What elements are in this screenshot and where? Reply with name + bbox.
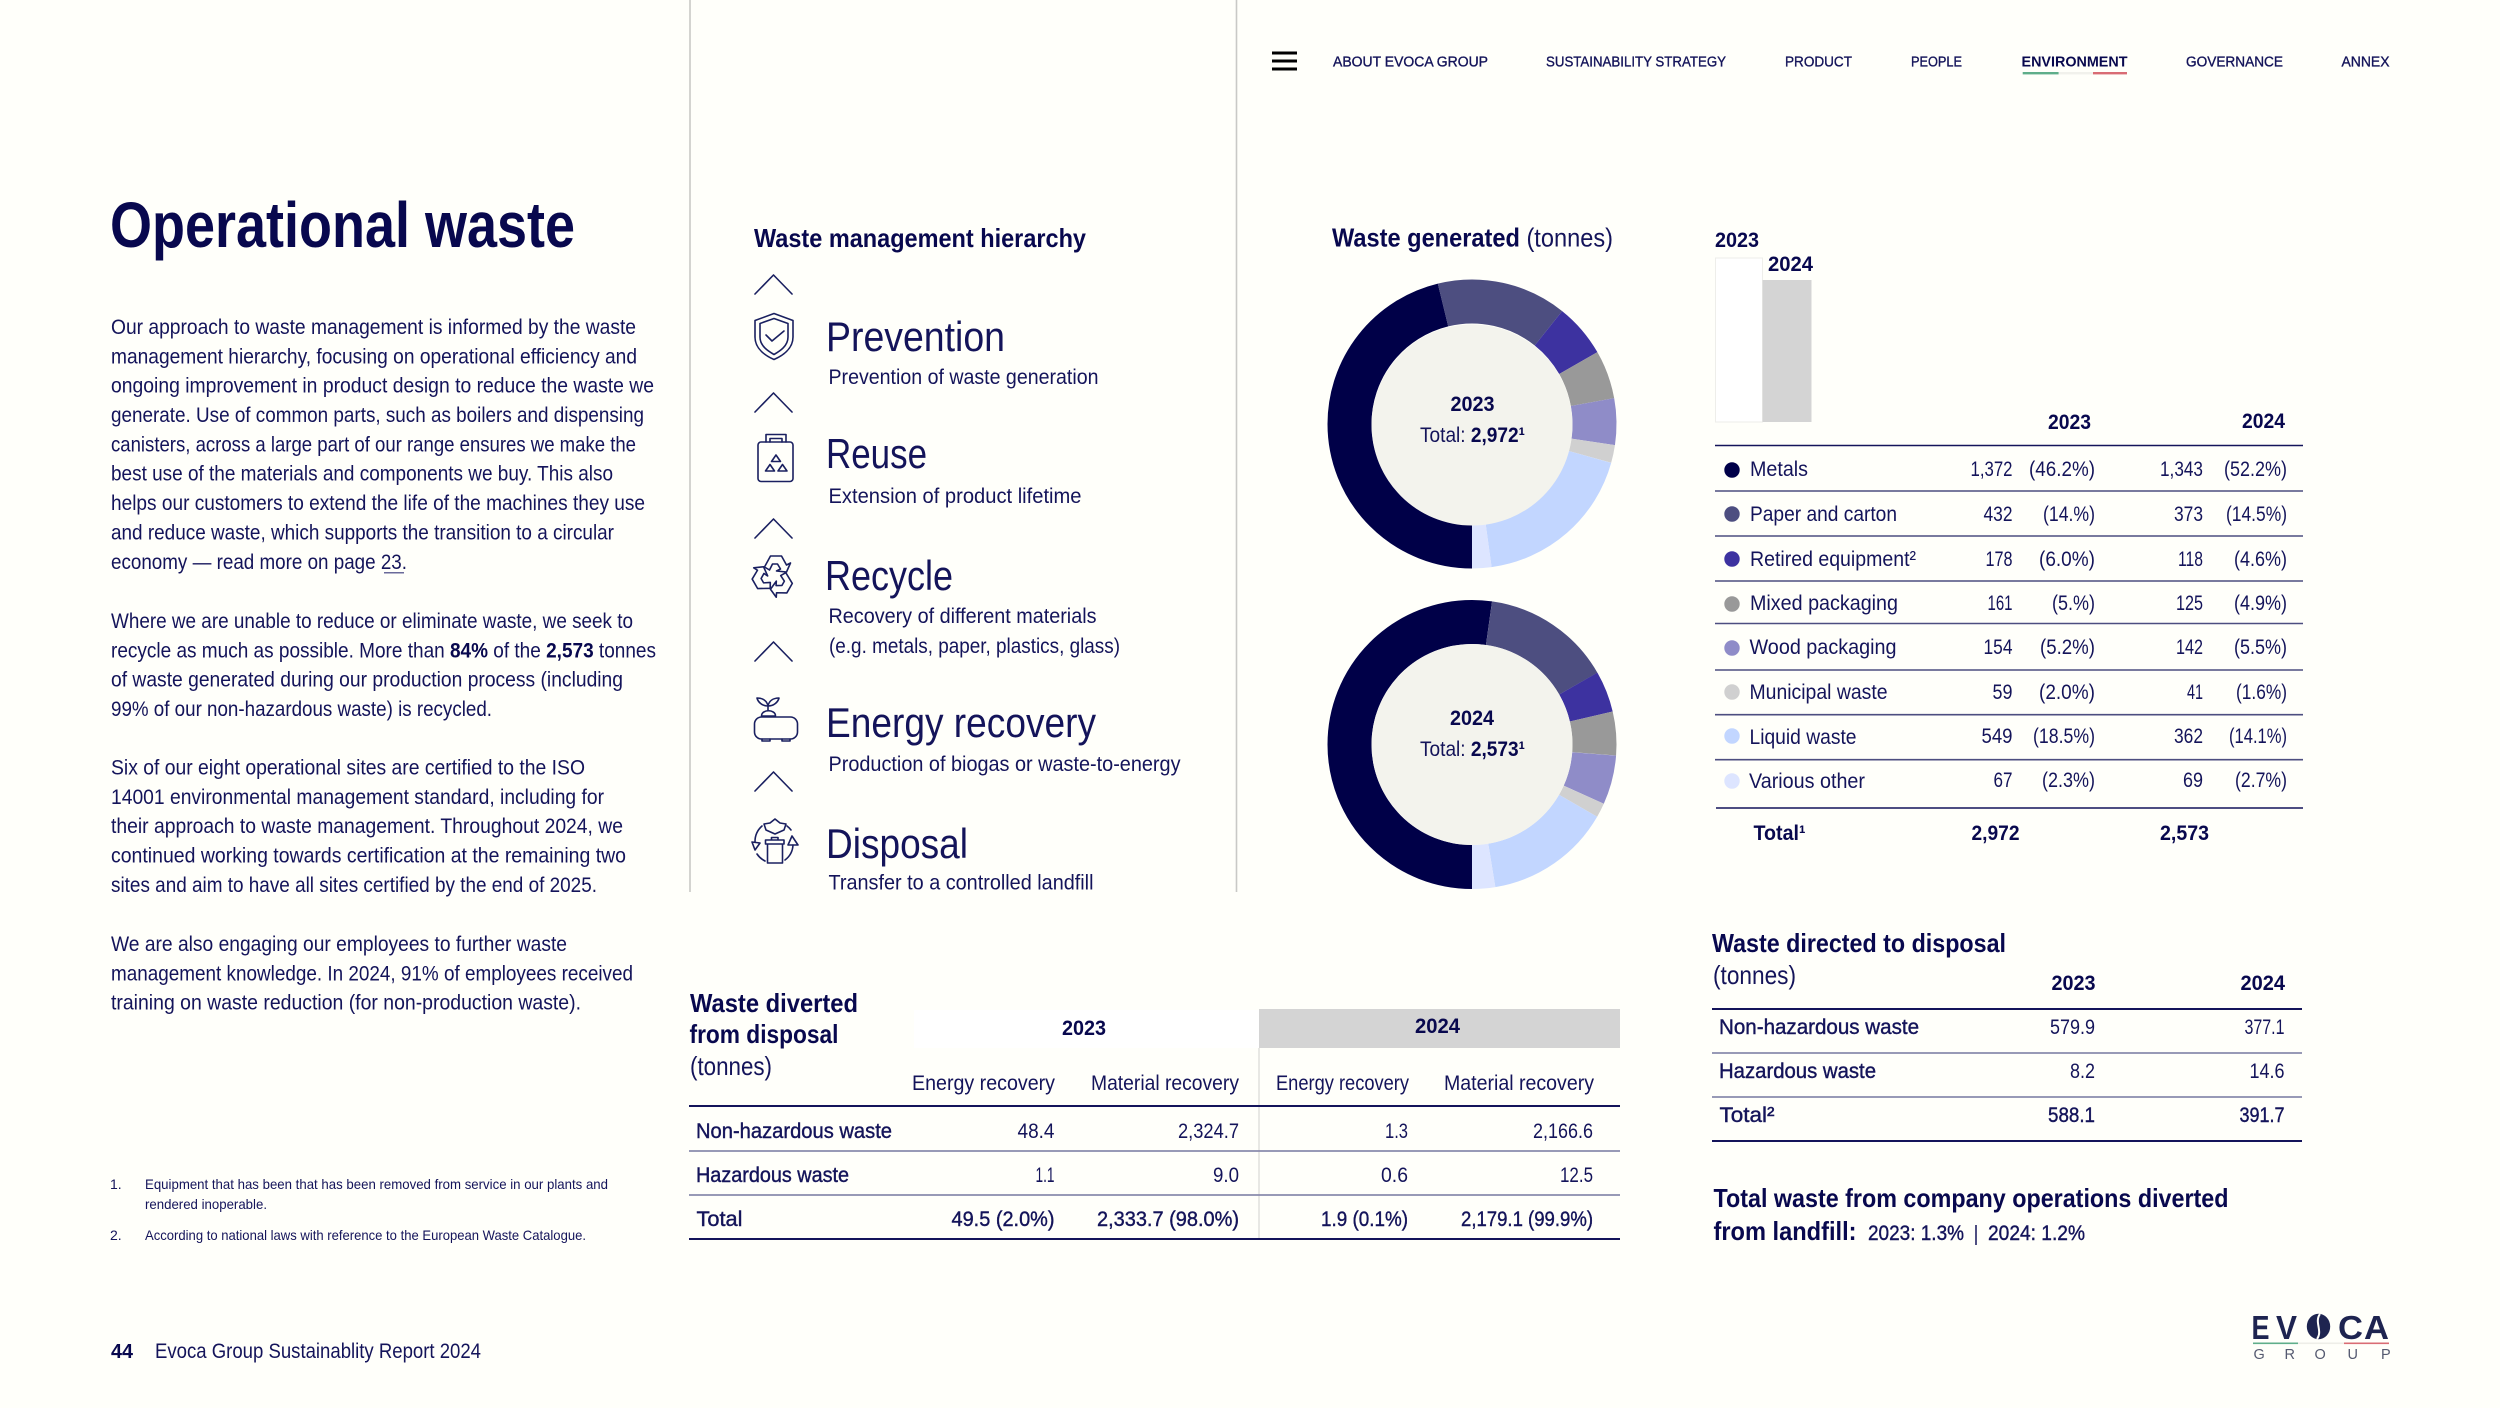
icon: shield [755, 314, 793, 360]
heading: Waste generated (tonnes) [1332, 222, 1613, 252]
row: total: 2,179.1 (99.9%) [1461, 1208, 1593, 1231]
row: wood packaging [1724, 636, 2287, 659]
row: retired equipment [1724, 548, 2287, 571]
panel: waste management hierarchy [748, 223, 1181, 894]
row: municipal waste: (2.0%) [2039, 681, 2095, 704]
heading: (tonnes) [1713, 960, 1796, 990]
intro text block: Where we are unable to reduce or eliminate waste, we seek to [111, 610, 633, 633]
row: total: 391.7 [2240, 1104, 2284, 1127]
row: wood packaging: 154 [1984, 636, 2013, 659]
row: hazardous: 12.5 [1560, 1164, 1593, 1187]
row: non-hazardous: 2,166.6 [1533, 1120, 1593, 1143]
logo: Evoca Group: O [2314, 1347, 2326, 1363]
callout: total diverted from landfill [1714, 1183, 2228, 1246]
chart: 2023 vs 2024 bars: 2024 [1768, 253, 1813, 276]
row: paper and carton: Paper and carton [1750, 503, 1897, 526]
row: non-hazardous [1719, 1016, 2284, 1039]
row: liquid waste: 362 [2174, 725, 2203, 748]
row: hazardous [696, 1164, 1593, 1187]
row: non-hazardous: Non-hazardous waste [1719, 1016, 1919, 1039]
row: liquid waste: Liquid waste [1750, 726, 1856, 749]
intro text block: Our approach to waste management is informed by the waste [111, 316, 636, 339]
row: total: Total¹ [1754, 822, 1806, 845]
row: mixed packaging: (5.%) [2052, 592, 2095, 615]
level: energy recovery [826, 699, 1181, 776]
row: municipal waste [1724, 681, 2287, 704]
row: total [696, 1208, 1593, 1231]
row: municipal waste: Municipal waste [1750, 681, 1888, 704]
row: liquid waste [1724, 725, 2287, 749]
callout: total diverted from landfill: Total waste from company operations diverted [1714, 1183, 2228, 1213]
level: recycle: (e.g. metals, paper, plastics, glass) [829, 635, 1120, 658]
table: waste generated by type: 2024 [2242, 410, 2285, 433]
donut chart: 2023 [1300, 252, 1644, 596]
donut chart: 2024: 2024 [1450, 707, 1494, 730]
footnotes: According to national laws with reference to the European Waste Catalogue. [145, 1227, 586, 1243]
navigation bar: ANNEX [2342, 55, 2390, 71]
intro text block: management knowledge. In 2024, 91% of employees received [111, 962, 633, 985]
row: total: 49.5 (2.0%) [952, 1208, 1054, 1231]
row: non-hazardous [696, 1120, 1593, 1143]
footnotes: 1. [110, 1176, 122, 1192]
row: total: Total [696, 1208, 742, 1231]
logo: Evoca Group: G [2254, 1347, 2265, 1363]
donut chart: 2023: 2023 [1450, 393, 1494, 416]
navigation bar: PRODUCT [1785, 55, 1852, 71]
row: liquid waste: 549 [1982, 725, 2012, 748]
intro text block: training on waste reduction (for non-production waste). [111, 992, 581, 1015]
table: waste directed to disposal: 2023 [2052, 972, 2096, 995]
table: waste diverted from disposal: Energy recovery [1276, 1072, 1409, 1095]
table: waste generated by type: 2023 [2048, 411, 2091, 434]
row: hazardous: Hazardous waste [1719, 1060, 1876, 1083]
row: municipal waste: 59 [1992, 681, 2012, 704]
navigation bar: SUSTAINABILITY STRATEGY [1546, 55, 1726, 71]
row: wood packaging: 142 [2176, 636, 2203, 659]
row: municipal waste: (1.6%) [2236, 681, 2287, 704]
intro text block: and reduce waste, which supports the transition to a circular [111, 521, 614, 544]
row: non-hazardous: 1.3 [1385, 1120, 1408, 1143]
intro text block: management hierarchy, focusing on operational efficiency and [111, 345, 637, 368]
row: total [1720, 1104, 2284, 1127]
level: reuse [826, 430, 1082, 508]
row: non-hazardous: 2,324.7 [1178, 1120, 1239, 1143]
row: mixed packaging [1724, 592, 2287, 615]
level: disposal: Disposal [826, 820, 968, 867]
level: disposal [826, 820, 1094, 894]
row: liquid waste: (14.1%) [2229, 725, 2287, 748]
intro text block: sites and aim to have all sites certified by the end of 2025. [111, 874, 597, 897]
row: total [1754, 822, 2209, 845]
level: energy recovery: Production of biogas or waste-to-energy [828, 753, 1181, 776]
row: retired equipment: 118 [2178, 548, 2203, 571]
footnotes [110, 1176, 608, 1243]
intro text block: economy — read more on page 23. [111, 551, 407, 574]
row: total: 588.1 [2048, 1104, 2095, 1127]
row: municipal waste: 41 [2187, 681, 2203, 704]
row: retired equipment: 178 [1986, 548, 2012, 571]
navigation bar: PEOPLE [1911, 55, 1962, 71]
heading: Waste management hierarchy [754, 223, 1086, 253]
table: waste generated by type [1715, 410, 2303, 845]
title: Operational waste [110, 189, 575, 261]
logo: Evoca Group: A [2364, 1309, 2389, 1346]
row: wood packaging: (5.5%) [2234, 636, 2287, 659]
table: waste diverted from disposal: 2023 [1062, 1017, 1106, 1040]
row: non-hazardous: 377.1 [2244, 1016, 2284, 1039]
intro text block: continued working towards certification at the remaining two [111, 844, 626, 868]
heading: from disposal [690, 1019, 838, 1049]
row: various other: 67 [1994, 769, 2012, 792]
row: hazardous: Hazardous waste [696, 1164, 849, 1187]
row: retired equipment: Retired equipment² [1750, 548, 1916, 571]
level: recycle: Recovery of different materials [828, 605, 1096, 628]
heading: Waste diverted [690, 988, 858, 1018]
icon: hamburger menu [1272, 52, 1297, 70]
chart: 2023 vs 2024 bars [1715, 229, 1813, 422]
row: hazardous: 0.6 [1381, 1164, 1408, 1187]
table: waste directed to disposal: 2024 [2240, 972, 2285, 995]
panel: waste generated donuts [1300, 222, 1644, 912]
heading [690, 988, 858, 1081]
row: non-hazardous: Non-hazardous waste [696, 1120, 892, 1143]
row: various other [1724, 769, 2287, 793]
intro text block [111, 316, 656, 1015]
icon: biogas tank [754, 698, 798, 741]
callout: total diverted from landfill: 2023: 1.3% [1868, 1222, 1964, 1245]
arrow: chevron [755, 519, 792, 538]
row: total: Total² [1720, 1104, 1774, 1127]
row: metals [1724, 458, 2287, 481]
icon: recycling bag [758, 434, 793, 482]
callout: total diverted from landfill: from landfill: [1714, 1216, 1856, 1246]
logo: Evoca Group [2252, 1309, 2391, 1363]
level: prevention: Prevention of waste generation [828, 366, 1098, 389]
row: total: 1.9 (0.1%) [1321, 1208, 1408, 1231]
row: various other: (2.3%) [2042, 769, 2095, 792]
row: mixed packaging: 161 [1988, 592, 2012, 615]
logo: Evoca Group: U [2348, 1347, 2358, 1363]
logo: Evoca Group: P [2381, 1347, 2391, 1363]
row: wood packaging: (5.2%) [2040, 636, 2095, 659]
navigation bar: GOVERNANCE [2186, 55, 2283, 71]
arrow: chevron [755, 275, 792, 294]
row: paper and carton: (14.5%) [2226, 503, 2287, 526]
row: non-hazardous: 579.9 [2050, 1016, 2095, 1039]
level: prevention [826, 313, 1098, 389]
footer: Evoca Group Sustainablity Report 2024 [155, 1340, 481, 1363]
footnotes: 2. [110, 1227, 122, 1243]
intro text block: generate. Use of common parts, such as boilers and dispensing [111, 404, 644, 427]
row: metals: (46.2%) [2029, 458, 2095, 481]
donut chart: 2024 [1305, 577, 1639, 912]
intro text block: canisters, across a large part of our range ensures we make the [111, 433, 636, 456]
table: waste diverted from disposal: Energy recovery [912, 1072, 1055, 1095]
intro text block: 99% of our non-hazardous waste) is recycled. [111, 698, 492, 721]
row: metals: Metals [1750, 458, 1808, 481]
row: mixed packaging: Mixed packaging [1750, 592, 1898, 615]
row: hazardous [1719, 1060, 2284, 1083]
row: total: 2,972 [1972, 822, 2020, 845]
row: total: 2,333.7 (98.0%) [1097, 1208, 1239, 1231]
row: metals: 1,372 [1970, 458, 2012, 481]
logo: Evoca Group: V [2276, 1309, 2297, 1346]
row: total: 2,573 [2160, 822, 2209, 845]
intro text block: their approach to waste management. Throughout 2024, we [111, 815, 623, 838]
icon: recycle [748, 556, 795, 601]
row: paper and carton: (14.%) [2043, 503, 2095, 526]
table: waste directed to disposal [1712, 928, 2302, 1141]
row: various other: (2.7%) [2235, 769, 2287, 792]
heading: (tonnes) [690, 1051, 772, 1081]
chart: 2023 vs 2024 bars: 2023 [1715, 229, 1759, 252]
level: recycle: Recycle [825, 552, 953, 599]
intro text block: ongoing improvement in product design to reduce the waste we [111, 375, 654, 398]
footer: 44 [111, 1341, 134, 1363]
row: mixed packaging: 125 [2176, 592, 2203, 615]
row: hazardous: 1.1 [1036, 1164, 1054, 1187]
icon: disposal [752, 819, 798, 863]
intro text block: of waste generated during our production process (including [111, 669, 623, 692]
row: non-hazardous: 48.4 [1018, 1120, 1055, 1143]
donut chart: 2024: Total: 2,573¹ [1420, 738, 1525, 761]
arrow: chevron [755, 642, 792, 661]
row: hazardous: 14.6 [2250, 1060, 2284, 1083]
row: liquid waste: (18.5%) [2033, 725, 2095, 748]
row: various other: Various other [1749, 770, 1865, 793]
intro text block: helps our customers to extend the life of the machines they use [111, 492, 645, 515]
level: recycle [825, 552, 1120, 658]
intro text block: 14001 environmental management standard, including for [111, 786, 604, 809]
logo: Evoca Group: E [2252, 1309, 2270, 1346]
navigation bar: ENVIRONMENT [2022, 55, 2128, 71]
row: paper and carton [1724, 503, 2287, 526]
table: waste diverted from disposal [689, 988, 1620, 1239]
row: paper and carton: 373 [2174, 503, 2203, 526]
intro text block: Six of our eight operational sites are certified to the ISO [111, 756, 585, 780]
arrow: chevron [755, 393, 792, 412]
table: waste diverted from disposal: Material recovery [1091, 1072, 1239, 1095]
row: retired equipment: (4.6%) [2234, 548, 2287, 571]
donut chart: 2023: Total: 2,972¹ [1420, 424, 1525, 447]
footnotes: rendered inoperable. [145, 1196, 267, 1212]
navigation bar: ABOUT EVOCA GROUP [1333, 55, 1488, 71]
level: energy recovery: Energy recovery [826, 699, 1096, 746]
intro text block: recycle as much as possible. More than 84% of the 2,573 tonnes [111, 639, 656, 662]
arrow: chevron [755, 772, 792, 791]
row: hazardous: 8.2 [2070, 1060, 2095, 1083]
row: mixed packaging: (4.9%) [2234, 592, 2287, 615]
callout: total diverted from landfill: 2024: 1.2% [1988, 1222, 2085, 1245]
row: retired equipment: (6.0%) [2039, 548, 2095, 571]
row: paper and carton: 432 [1984, 503, 2012, 526]
heading: Waste directed to disposal [1712, 928, 2006, 958]
row: metals: 1,343 [2160, 458, 2203, 481]
heading [1712, 928, 2006, 990]
logo: Evoca Group: C [2338, 1309, 2363, 1346]
level: disposal: Transfer to a controlled landfill [828, 872, 1094, 894]
row: wood packaging: Wood packaging [1750, 636, 1896, 659]
table: waste diverted from disposal: 2024 [1415, 1015, 1460, 1038]
navigation bar [1272, 52, 2390, 74]
intro text block: best use of the materials and components we buy. This also [111, 463, 613, 486]
intro text block: We are also engaging our employees to further waste [111, 933, 567, 956]
level: reuse: Reuse [826, 430, 927, 477]
logo: Evoca Group: R [2284, 1347, 2295, 1363]
level: reuse: Extension of product lifetime [828, 485, 1082, 508]
row: hazardous: 9.0 [1213, 1164, 1239, 1187]
footnotes: Equipment that has been that has been removed from service in our plants and [145, 1176, 608, 1192]
level: prevention: Prevention [826, 313, 1005, 360]
row: metals: (52.2%) [2224, 458, 2287, 481]
row: various other: 69 [2183, 769, 2203, 792]
table: waste diverted from disposal: Material recovery [1444, 1072, 1594, 1095]
